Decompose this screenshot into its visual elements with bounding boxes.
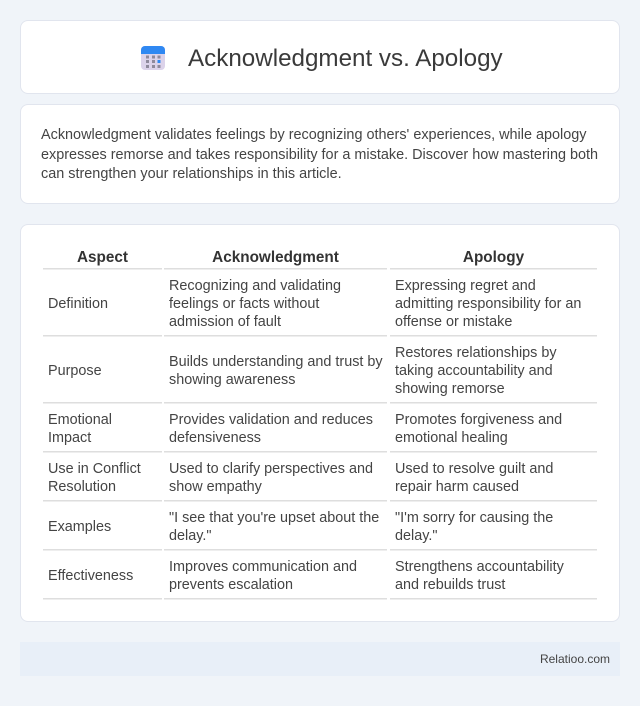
- row: Effectiveness: [48, 559, 564, 593]
- row: Use in Conflict Resolution: Use in Conflict: [48, 461, 141, 477]
- row: Purpose: Builds understanding and trust by: [169, 354, 383, 370]
- row: Purpose: showing remorse: [395, 381, 505, 397]
- row: Effectiveness: Strengthens accountability: [395, 559, 564, 575]
- row: Definition: admission of fault: [169, 314, 281, 330]
- row: Definition: Recognizing and validating: [169, 278, 341, 294]
- row: Use in Conflict Resolution: [48, 461, 553, 495]
- row: Emotional Impact: Impact: [48, 430, 91, 446]
- row: Purpose: Purpose: [48, 363, 102, 379]
- row: Use in Conflict Resolution: show empathy: [169, 479, 262, 495]
- intro text: Acknowledgment validates feelings by recognizing others' experiences, while apology: [41, 127, 586, 143]
- table card: [20, 224, 620, 622]
- row: Purpose: [48, 345, 557, 397]
- row: Definition: admitting responsibility for an: [395, 296, 581, 312]
- row: Use in Conflict Resolution: Resolution: [48, 479, 116, 495]
- footer bar: [20, 642, 620, 676]
- intro card: [20, 104, 620, 204]
- intro text: expresses remorse and takes responsibility for a mistake. Discover how mastering both: [41, 146, 598, 162]
- header: Apology: Apology: [463, 249, 524, 266]
- header: Aspect: Aspect: [77, 249, 128, 266]
- row: Use in Conflict Resolution: Used to resolve guilt and: [395, 461, 553, 477]
- row: Effectiveness: Effectiveness: [48, 568, 133, 584]
- title: Acknowledgment vs. Apology: [188, 45, 503, 72]
- row: Definition: offense or mistake: [395, 314, 512, 330]
- row: Purpose: Restores relationships by: [395, 345, 557, 361]
- icon: calendar: [141, 46, 165, 70]
- title card: [20, 20, 620, 94]
- footer text: Relatioo.com: [540, 652, 610, 666]
- row: Effectiveness: Improves communication and: [169, 559, 357, 575]
- row: Emotional Impact: emotional healing: [395, 430, 508, 446]
- row: Use in Conflict Resolution: repair harm caused: [395, 479, 519, 495]
- row: Emotional Impact: Emotional: [48, 412, 112, 428]
- row: Effectiveness: and rebuilds trust: [395, 577, 505, 593]
- row: Definition: Definition: [48, 296, 108, 312]
- row: Purpose: taking accountability and: [395, 363, 553, 379]
- row: Effectiveness: prevents escalation: [169, 577, 293, 593]
- row: Examples: Examples: [48, 519, 111, 535]
- row: Use in Conflict Resolution: Used to clarify perspectives and: [169, 461, 373, 477]
- row: Emotional Impact: [48, 412, 562, 446]
- row: Emotional Impact: Provides validation and reduces: [169, 412, 373, 428]
- row: Examples: "I'm sorry for causing the: [395, 510, 553, 526]
- intro text: [41, 127, 598, 182]
- row: Examples: delay.": [169, 528, 211, 544]
- row: Definition: Expressing regret and: [395, 278, 536, 294]
- header: Acknowledgment: Acknowledgment: [212, 249, 339, 266]
- row: Definition: [48, 278, 581, 330]
- row: Emotional Impact: Promotes forgiveness and: [395, 412, 562, 428]
- row: Examples: "I see that you're upset about the: [169, 510, 379, 526]
- row: Definition: feelings or facts without: [169, 296, 319, 312]
- row: Purpose: showing awareness: [169, 372, 295, 388]
- row: Examples: delay.": [395, 528, 437, 544]
- row: Examples: [48, 510, 553, 544]
- row: Emotional Impact: defensiveness: [169, 430, 261, 446]
- intro text: can strengthen your relationships in this article.: [41, 166, 342, 182]
